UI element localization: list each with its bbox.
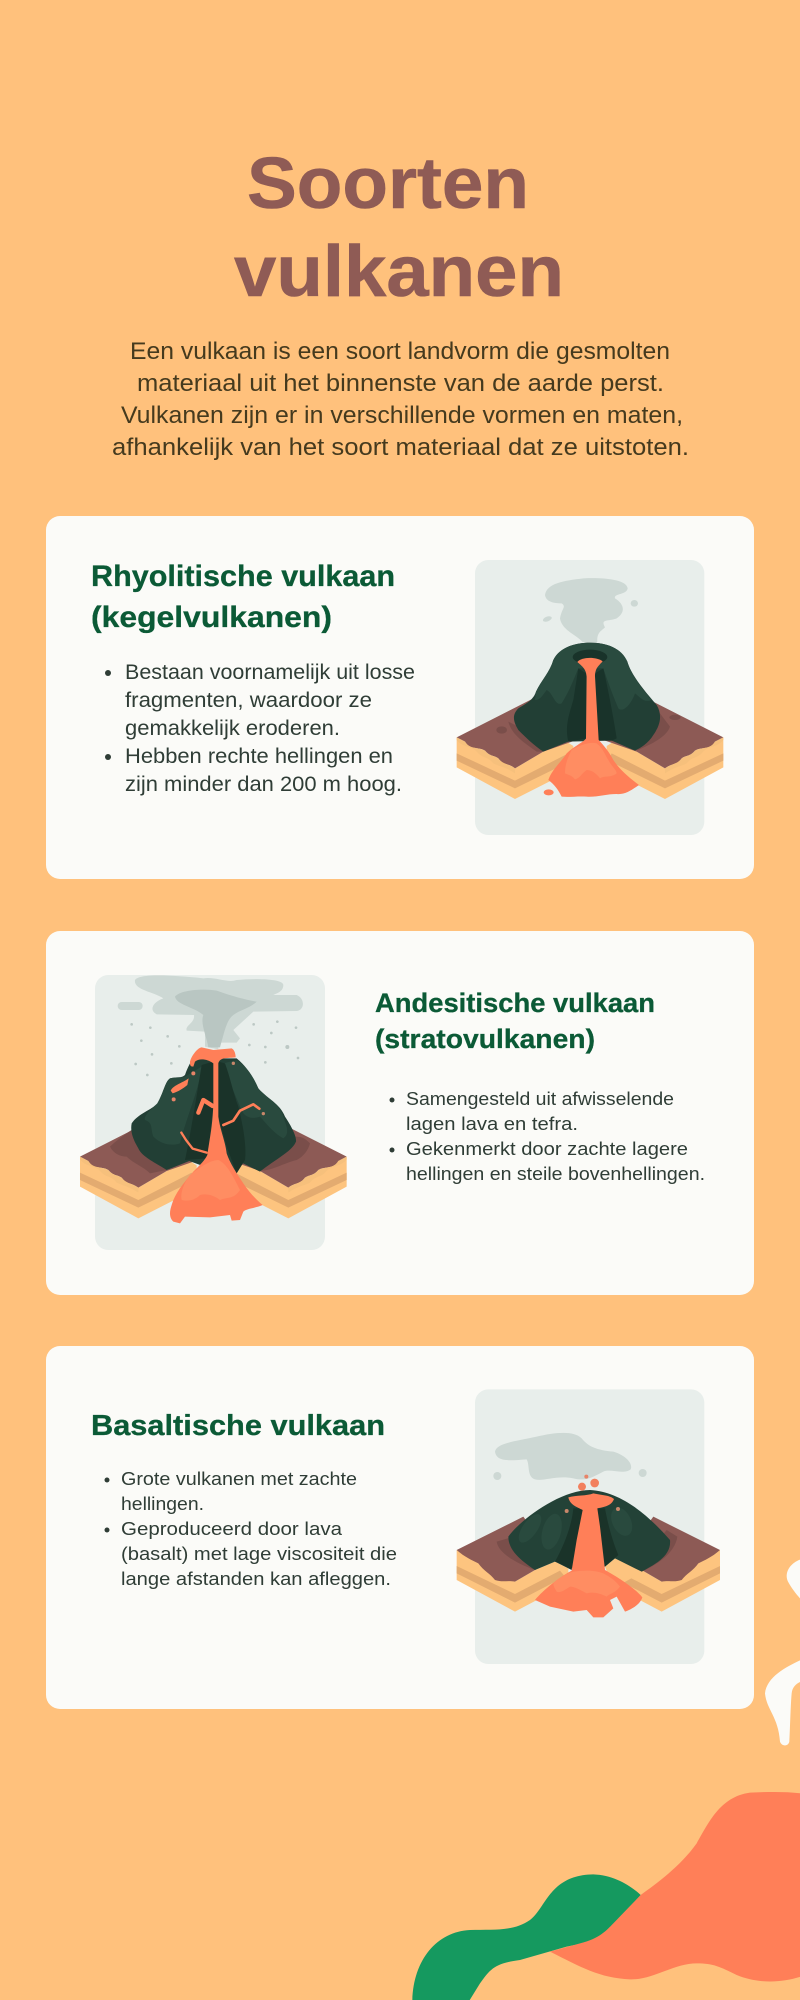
- heading: rhyolitische vulkaan: Rhyolitische vulkaan: [91, 560, 395, 593]
- bullet list: Grote vulkanen met zachte: [121, 1468, 357, 1489]
- intro text: [112, 338, 689, 461]
- intro text: afhankelijk van het soort materiaal dat ze uitstoten.: [112, 434, 689, 461]
- bullet list: hellingen en steile bovenhellingen.: [406, 1163, 705, 1184]
- bullet list: Hebben rechte hellingen en: [125, 745, 393, 768]
- heading: andesitische vulkaan: (stratovulkanen): [375, 1024, 595, 1054]
- bullet list: fragmenten, waardoor ze: [125, 689, 372, 712]
- bullet list: [390, 1088, 705, 1184]
- bullet list: lange afstanden kan afleggen.: [121, 1568, 391, 1589]
- intro text: Vulkanen zijn er in verschillende vormen en maten,: [121, 402, 683, 429]
- bullet list: Geproduceerd door lava: [121, 1518, 343, 1539]
- illustration: rhyolitic volcano: [457, 560, 723, 835]
- title: Soorten: [247, 144, 529, 224]
- panel: basaltische vulkaan: [46, 1346, 754, 1709]
- bullet list: [105, 661, 415, 796]
- decoration: coral wave: [550, 1792, 800, 1981]
- bullet list: zijn minder dan 200 m hoog.: [125, 773, 402, 796]
- title: [234, 144, 564, 312]
- illustration: andesitic stratovolcano: [80, 975, 347, 1250]
- bullet list: gemakkelijk eroderen.: [125, 717, 340, 740]
- intro text: Een vulkaan is een soort landvorm die gesmolten: [130, 338, 670, 365]
- bullet list: [104, 1468, 397, 1589]
- bullet list: lagen lava en tefra.: [406, 1113, 578, 1134]
- intro text: materiaal uit het binnenste van de aarde perst.: [137, 370, 664, 397]
- heading: andesitische vulkaan: Andesitische vulkaan: [375, 988, 655, 1018]
- panel: rhyolitische vulkaan: [46, 516, 754, 879]
- heading: rhyolitische vulkaan: (kegelvulkanen): [91, 601, 332, 634]
- bullet list: hellingen.: [121, 1493, 204, 1514]
- bullet list: (basalt) met lage viscositeit die: [121, 1543, 397, 1564]
- bullet list: Gekenmerkt door zachte lagere: [406, 1138, 688, 1159]
- decoration: white lava drips: [765, 1559, 800, 1745]
- bullet list: Samengesteld uit afwisselende: [406, 1088, 674, 1109]
- heading: andesitische vulkaan: [375, 988, 655, 1054]
- heading: rhyolitische vulkaan: [91, 560, 395, 634]
- title: vulkanen: [234, 232, 564, 312]
- panel: andesitische vulkaan: [46, 931, 754, 1295]
- illustration: basaltic shield volcano: [457, 1389, 720, 1664]
- bullet list: Bestaan voornamelijk uit losse: [125, 661, 415, 684]
- heading: basaltische vulkaan: Basaltische vulkaan: [91, 1410, 385, 1442]
- decoration: green wave: [412, 1874, 641, 2000]
